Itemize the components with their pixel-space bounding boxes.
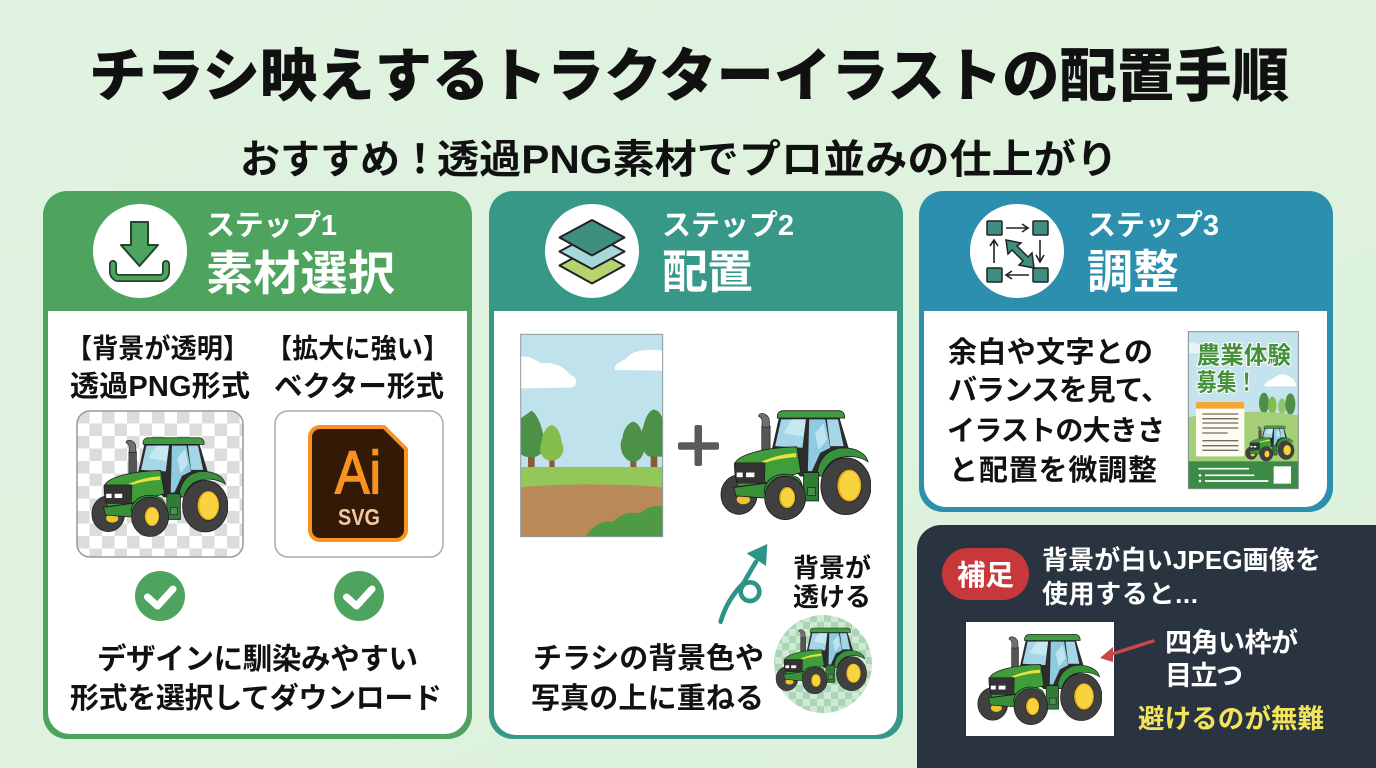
note text: 使用すると... (1042, 579, 1198, 609)
icon: download (93, 204, 187, 298)
step 3 description: バランスを見て、 (948, 375, 1170, 407)
step 1 description: デザインに馴染みやすい (97, 642, 418, 676)
illustration: finished flyer: 募集！ (1197, 370, 1257, 397)
illustration: finished flyer (1188, 332, 1298, 489)
icon: check right (334, 571, 384, 621)
subtitle: おすすめ (240, 138, 400, 182)
step 3 description: 余白や文字との (948, 336, 1153, 369)
step 2 description: 写真の上に重ねる (531, 682, 764, 715)
icon: check left (135, 571, 185, 621)
icon: plus (678, 425, 719, 466)
panel: supplement note (917, 525, 1376, 768)
step 3 description: イラストの大きさ (947, 415, 1165, 446)
callout: better avoided: 避けるのが無難 (1138, 704, 1324, 734)
option label: vector: ベクター形式 (274, 371, 444, 403)
step 1 description: 形式を選択してダウンロード (70, 681, 442, 715)
option label: transparent PNG: 【背景が透明】 (66, 333, 249, 364)
callout: square frame stands out (1165, 627, 1298, 691)
step 2 heading: 配置 (662, 246, 753, 298)
icon: layers (545, 204, 639, 298)
option label: transparent PNG: 透過PNG形式 (70, 370, 250, 403)
panel: step 3 adjustment (919, 191, 1333, 512)
callout: square frame stands out: 四角い枠が (1165, 627, 1298, 658)
illustration: tractor on checker circle (774, 615, 872, 713)
illustration: tractor on white box (966, 622, 1114, 736)
option label: vector: 【拡大に強い】 (266, 334, 449, 364)
panel: step 2 placement (489, 191, 903, 739)
option label: vector (266, 334, 449, 403)
note text (1042, 545, 1321, 609)
label: background shows through (793, 553, 871, 612)
step 2 description (531, 642, 764, 715)
subtitle: ！ (400, 138, 440, 182)
step 3 label: ステップ3 (1087, 209, 1219, 242)
note text: 背景が白いJPEG画像を (1042, 545, 1321, 575)
step 1 label: ステップ1 (206, 209, 337, 242)
illustration: finished flyer: 農業体験 (1197, 342, 1291, 369)
step 2 label: ステップ2 (662, 209, 794, 242)
illustration: flyer background (518, 334, 667, 537)
step 1 description (70, 642, 442, 715)
subtitle: 透過PNG素材でプロ並みの仕上がり (437, 138, 1118, 182)
arrow: red pointer (1100, 641, 1153, 662)
card: AI SVG file icon: SVG (338, 504, 380, 530)
option label: transparent PNG (66, 333, 250, 403)
badge: supplement: 補足 (957, 560, 1014, 592)
card: AI SVG file icon: Ai (335, 439, 381, 506)
arrow: curved teal (721, 544, 767, 622)
icon: resize (970, 204, 1064, 298)
step 3 description (947, 336, 1170, 487)
step 3 description: と配置を微調整 (949, 454, 1157, 487)
step 3 heading: 調整 (1087, 246, 1179, 298)
step 2 description: チラシの背景色や (533, 642, 764, 675)
panel: step 1 material selection (43, 191, 472, 739)
label: background shows through: 透ける (793, 582, 871, 612)
illustration: tractor (721, 411, 871, 520)
label: background shows through: 背景が (793, 553, 871, 583)
callout: square frame stands out: 目立つ (1165, 661, 1243, 691)
step 1 heading: 素材選択 (206, 247, 395, 300)
card: transparent PNG tractor (77, 411, 243, 557)
title: チラシ映えするトラクターイラストの配置手順 (89, 44, 1289, 109)
card: AI SVG file icon (275, 411, 443, 557)
badge: supplement (942, 548, 1029, 600)
